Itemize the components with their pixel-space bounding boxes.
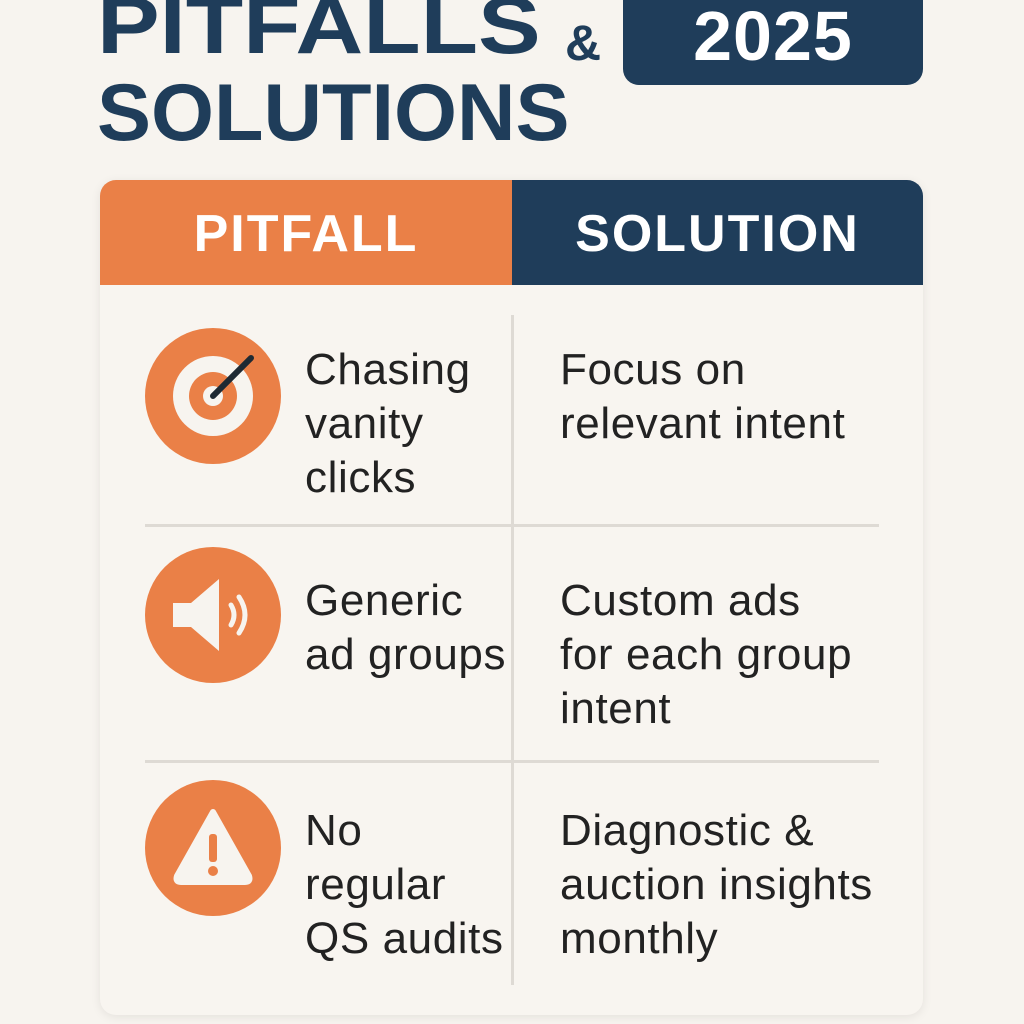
text: pitfall 3: [305, 806, 504, 963]
text: solution 1: Focus on: [560, 345, 746, 394]
text: solution 3: [560, 806, 873, 963]
text: solution 3: monthly: [560, 914, 718, 963]
header: pitfall: [100, 180, 512, 285]
text: pitfall 2: ad groups: [305, 630, 506, 679]
text: pitfall 3: No: [305, 806, 362, 855]
text: pitfall 3: regular: [305, 860, 446, 909]
text: solution 1: relevant intent: [560, 399, 845, 448]
header: pitfall: PITFALL: [194, 205, 418, 263]
text: pitfall 1: [305, 345, 471, 502]
text: pitfall 2: [305, 576, 506, 679]
text: solution 2: for each group: [560, 630, 852, 679]
text: solution 2: Custom ads: [560, 576, 801, 625]
icon: megaphone: [145, 547, 281, 683]
table panel: [100, 180, 923, 1015]
icon: warning: [145, 780, 281, 916]
text: pitfall 1: Chasing: [305, 345, 471, 394]
icon: target: [145, 328, 281, 464]
title: ampersand: &: [565, 15, 601, 71]
text: solution 3: Diagnostic &: [560, 806, 814, 855]
text: solution 1: [560, 345, 845, 448]
text: pitfall 1: vanity: [305, 399, 424, 448]
text: pitfall 2: Generic: [305, 576, 463, 625]
text: solution 2: intent: [560, 684, 671, 733]
text: solution 3: auction insights: [560, 860, 873, 909]
header: solution: SOLUTION: [575, 205, 860, 263]
text: solution 2: [560, 576, 852, 733]
header: solution: [512, 180, 923, 285]
title: solutions: SOLUTIONS: [97, 68, 570, 158]
text: pitfall 3: QS audits: [305, 914, 504, 963]
text: pitfall 1: clicks: [305, 453, 416, 502]
year badge: [623, 0, 923, 85]
